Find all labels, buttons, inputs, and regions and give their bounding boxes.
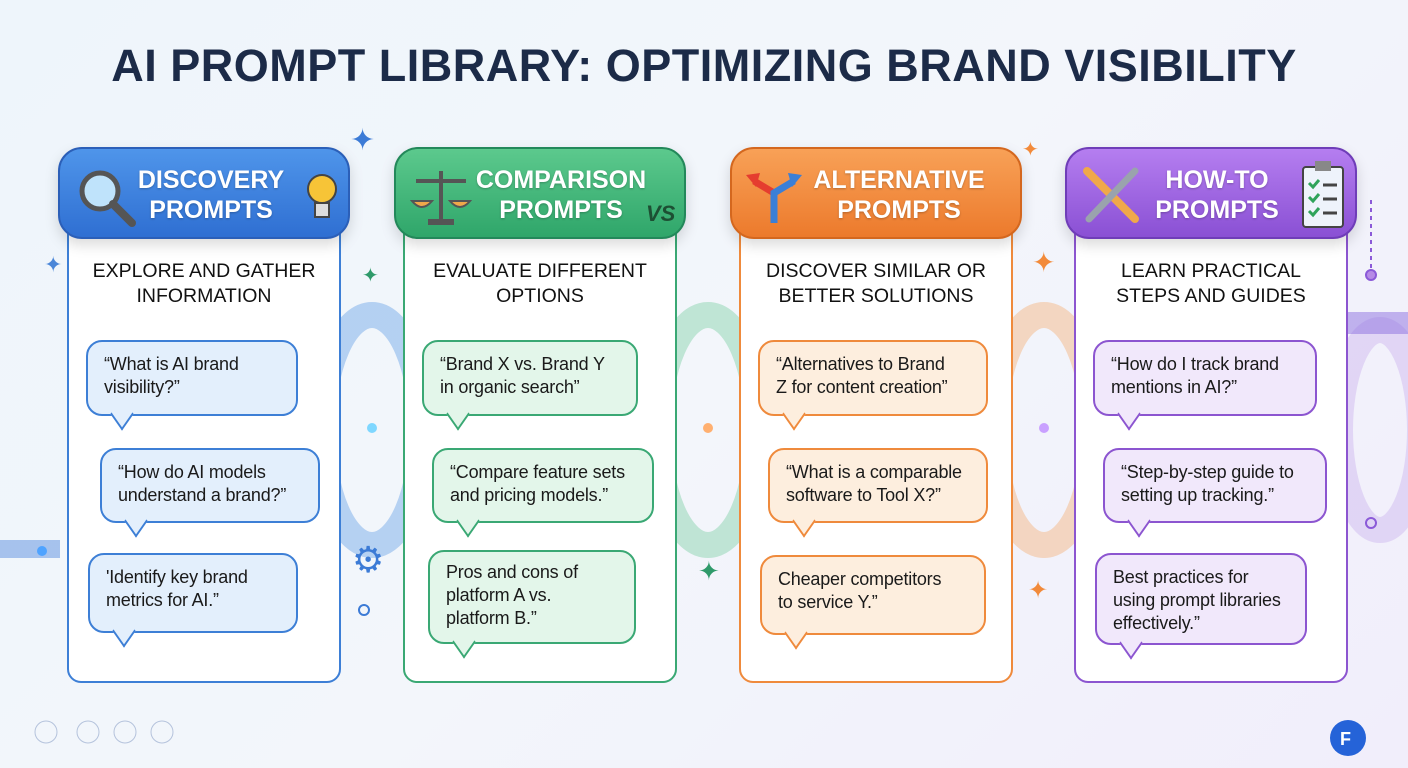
panel: alternative — [725, 147, 1027, 683]
header: alternative: PROMPTS — [837, 196, 961, 224]
bubble 3: 'Identify key brand — [106, 567, 248, 587]
bubble 2 — [768, 448, 988, 523]
panel: discovery — [53, 147, 355, 683]
bubble 1: visibility?” — [104, 377, 180, 397]
bubble 2: “What is a comparable — [786, 462, 962, 482]
bubble 1: “Alternatives to Brand — [776, 354, 945, 374]
title: AI PROMPT LIBRARY: OPTIMIZING BRAND VISIBILITY — [111, 40, 1297, 91]
icon: checklist — [1302, 161, 1344, 228]
subtitle: EXPLORE AND GATHER — [93, 260, 315, 282]
icon: magnifier — [80, 170, 136, 227]
bubble 3 — [1095, 553, 1307, 645]
bubble 1 — [758, 340, 988, 416]
header: comparison: PROMPTS — [499, 196, 623, 224]
bubble 3: Pros and cons of — [446, 562, 578, 582]
bubble 1: “What is AI brand — [104, 354, 239, 374]
bubble 1 — [86, 340, 298, 416]
header: discovery — [58, 147, 350, 239]
background connectors: ✦ — [1028, 577, 1048, 604]
bubble 2: setting up tracking.” — [1121, 485, 1274, 505]
bubble 2: “How do AI models — [118, 462, 266, 482]
bubble 3 — [760, 555, 986, 635]
header: discovery: DISCOVERY — [138, 166, 284, 194]
subtitle: LEARN PRACTICAL — [1121, 260, 1301, 282]
background connectors: ✦ — [698, 556, 720, 586]
header: discovery: PROMPTS — [149, 196, 273, 224]
background connectors: ✦ — [1032, 247, 1055, 278]
background connectors: ✦ — [350, 124, 375, 157]
header: alternative: ALTERNATIVE — [813, 166, 985, 194]
bubble 3: to service Y.” — [778, 592, 878, 612]
panel: comparison — [389, 147, 691, 683]
icon: scales — [410, 171, 472, 225]
bubble 3: metrics for AI.” — [106, 590, 219, 610]
header: how-to — [1065, 147, 1357, 239]
background connectors: ✦ — [44, 252, 62, 277]
bubble 1: mentions in AI?” — [1111, 377, 1237, 397]
bubble 1 — [422, 340, 638, 416]
subtitle: DISCOVER SIMILAR OR — [766, 260, 986, 282]
subtitle — [766, 260, 986, 307]
bubble 2: understand a brand?” — [118, 485, 286, 505]
background connectors: ⚙ — [352, 539, 384, 580]
background connectors: ✦ — [362, 265, 379, 287]
subtitle: OPTIONS — [496, 285, 584, 307]
subtitle: STEPS AND GUIDES — [1116, 285, 1306, 307]
panel: how-to — [1060, 147, 1362, 683]
subtitle: BETTER SOLUTIONS — [778, 285, 974, 307]
bubble 2 — [100, 448, 320, 523]
bubble 3: platform A vs. — [446, 585, 551, 605]
bubble 3 — [428, 550, 636, 644]
subtitle: EVALUATE DIFFERENT — [433, 260, 647, 282]
bubble 3 — [88, 553, 298, 633]
subtitle — [433, 260, 647, 307]
background connectors: ✦ — [1022, 139, 1039, 161]
bubble 1: Z for content creation” — [776, 377, 947, 397]
header: comparison: COMPARISON — [476, 166, 646, 194]
background connectors: F — [1340, 729, 1351, 749]
header: how-to: HOW-TO — [1165, 166, 1269, 194]
header: how-to: PROMPTS — [1155, 196, 1279, 224]
bubble 3: effectively.” — [1113, 613, 1200, 633]
icon: bulb — [307, 174, 337, 218]
bubble 3: using prompt libraries — [1113, 590, 1281, 610]
header: alternative — [730, 147, 1022, 239]
bubble 1: “Brand X vs. Brand Y — [440, 354, 605, 374]
subtitle: INFORMATION — [136, 285, 272, 307]
bubble 1: “How do I track brand — [1111, 354, 1279, 374]
bubble 2 — [432, 448, 654, 523]
bubble 3: Best practices for — [1113, 567, 1248, 587]
subtitle — [1116, 260, 1306, 307]
bubble 2: and pricing models.” — [450, 485, 608, 505]
subtitle — [93, 260, 315, 307]
bubble 1: in organic search” — [440, 377, 579, 397]
bubble 1 — [1093, 340, 1317, 416]
bubble 2: software to Tool X?” — [786, 485, 941, 505]
bubble 2: “Compare feature sets — [450, 462, 625, 482]
bubble 2: “Step-by-step guide to — [1121, 462, 1294, 482]
bubble 3: platform B.” — [446, 608, 537, 628]
bubble 3: Cheaper competitors — [778, 569, 941, 589]
icon: arrows — [746, 173, 802, 223]
header: comparison: VS — [646, 201, 675, 226]
bubble 2 — [1103, 448, 1327, 523]
header: comparison — [394, 147, 686, 239]
icon: tools — [1083, 167, 1139, 223]
